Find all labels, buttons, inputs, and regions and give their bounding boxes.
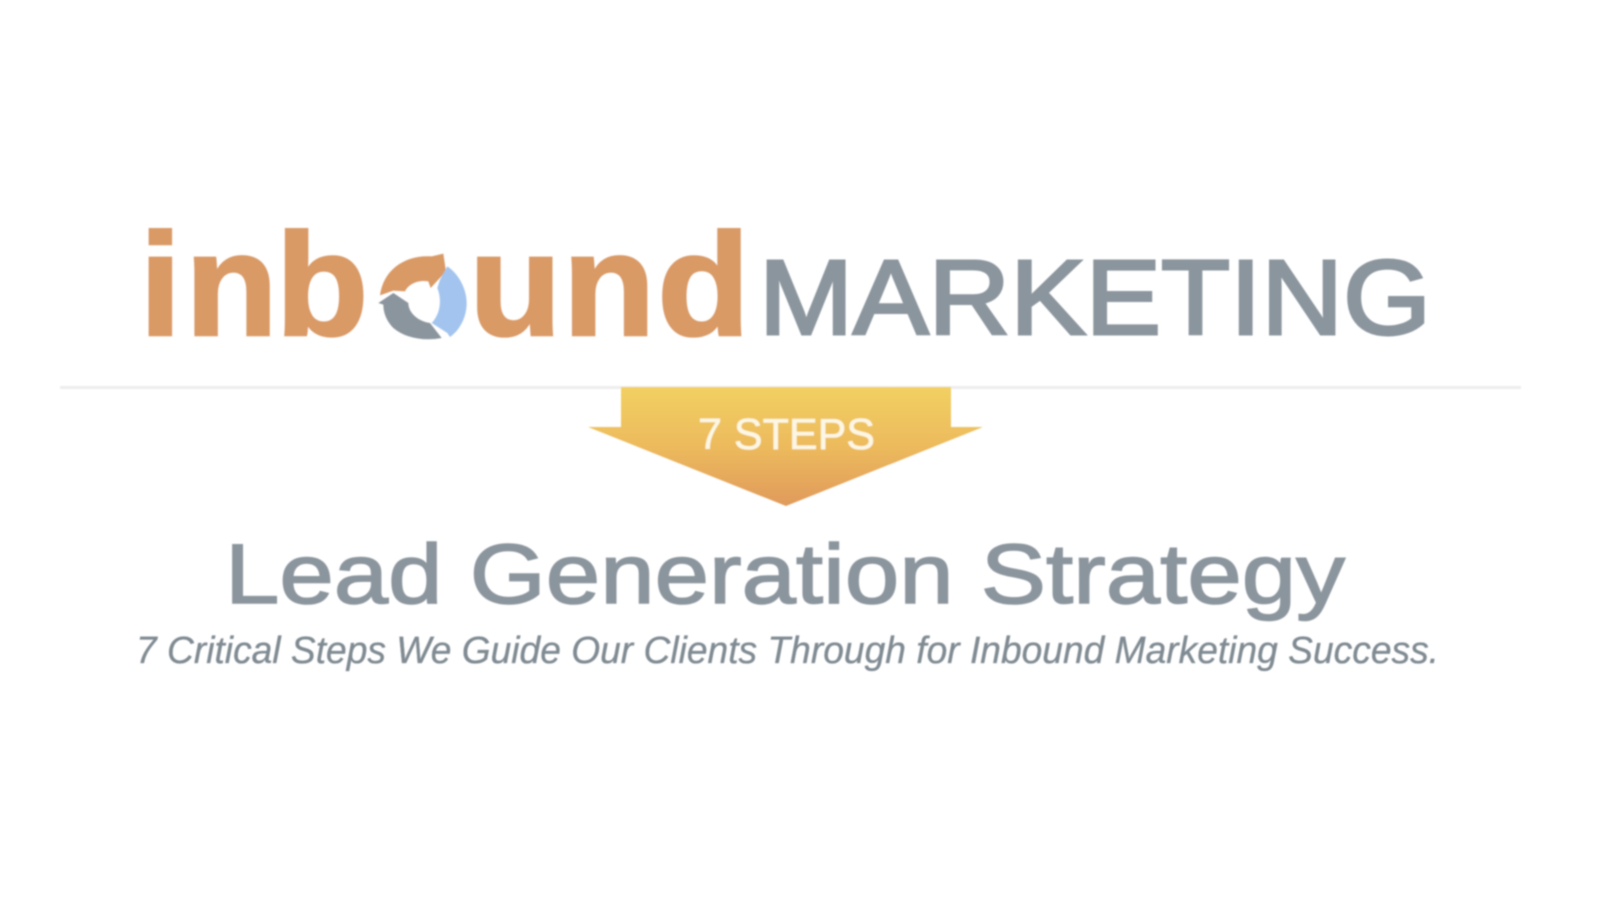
icon: circular arrows forming the letter o: [378, 254, 467, 339]
subtitle: 7 Critical Steps We Guide Our Clients Through for Inbound Marketing Success.: [136, 630, 1439, 672]
arrow banner: 7 steps: [588, 387, 983, 506]
arrow banner: 7 steps: 7 STEPS: [698, 410, 875, 459]
logo word: inbound: n: [185, 203, 278, 366]
logo word: MARKETING: MARKETING: [759, 239, 1431, 357]
logo word: inbound: n: [563, 203, 655, 366]
logo word: inbound: i: [139, 203, 182, 366]
logo word: inbound: d: [657, 203, 750, 366]
logo word: inbound: u: [469, 203, 562, 366]
heading: Lead Generation Strategy: [225, 527, 1345, 621]
divider line: [60, 386, 1521, 389]
logo word: inbound: b: [276, 203, 368, 366]
